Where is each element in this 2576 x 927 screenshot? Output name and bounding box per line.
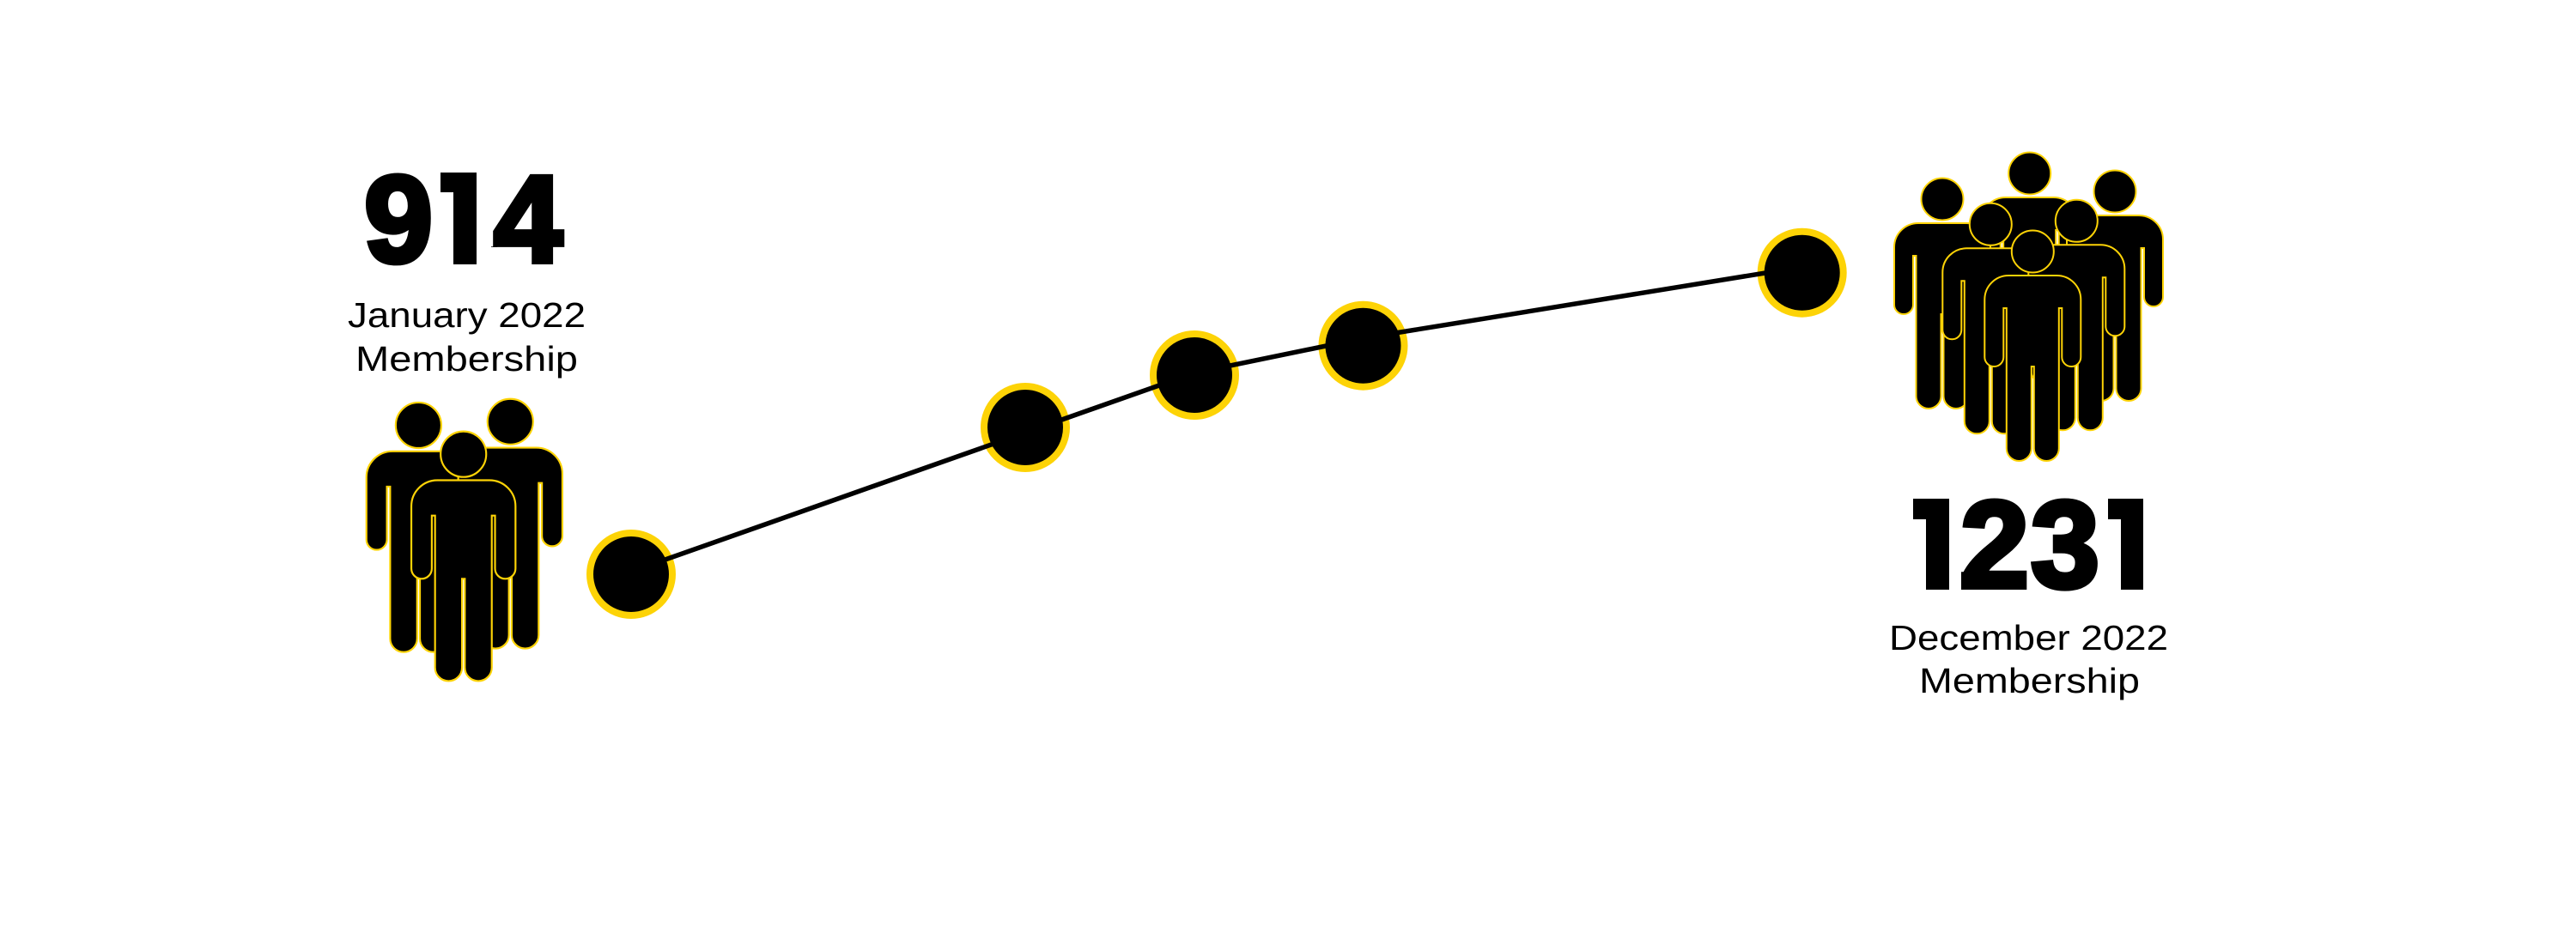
start label: January 2022 Membership: Membership bbox=[355, 339, 578, 379]
start label: January 2022 Membership: January 2022 bbox=[348, 295, 586, 335]
end label: December 2022 Membership: December 2022 bbox=[1889, 618, 2168, 657]
start label: January 2022 Membership bbox=[348, 295, 586, 379]
trend line bbox=[631, 267, 1802, 572]
start total: 914: 914 bbox=[364, 150, 562, 288]
start total: 914 bbox=[366, 173, 565, 266]
icon: group of three people bbox=[367, 399, 562, 681]
end label: December 2022 Membership bbox=[1889, 618, 2168, 700]
end label: December 2022 Membership: Membership bbox=[1919, 661, 2140, 700]
data points bbox=[590, 232, 1844, 615]
end total: 1231: 1231 bbox=[1902, 476, 2166, 614]
line chart: membership growth bbox=[590, 232, 1844, 615]
end total: 1231 bbox=[1913, 498, 2143, 591]
icon: group of six people bbox=[1894, 153, 2163, 461]
